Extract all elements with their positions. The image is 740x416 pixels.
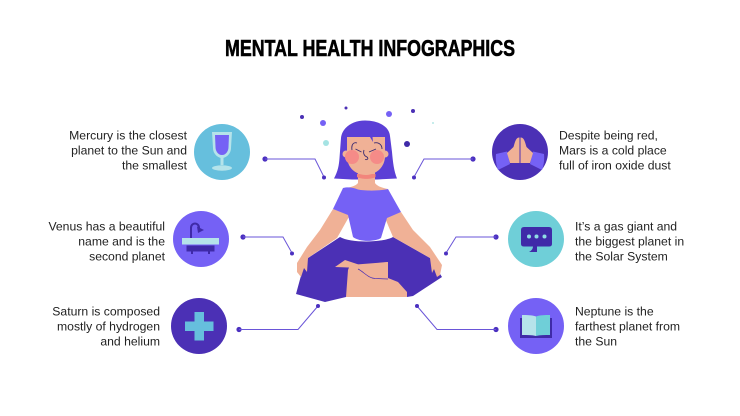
face (342, 137, 388, 175)
text: Neptune: farthest planet from (575, 320, 680, 334)
text: Jupiter: It’s a gas giant and (575, 220, 677, 234)
floating dots (300, 106, 434, 147)
shirt (333, 187, 401, 241)
text: Saturn: mostly of hydrogen (57, 320, 160, 334)
text: Venus: second planet (89, 250, 166, 264)
legs and foot (346, 262, 407, 297)
text: Mercury: planet to the Sun and (71, 144, 187, 158)
icon: plus (171, 298, 227, 354)
text: Mars: full of iron oxide dust (559, 158, 671, 172)
arms (297, 209, 350, 277)
connector: bottom left (236, 304, 320, 332)
text: Saturn: and helium (100, 334, 160, 348)
text: Mercury: Mercury is the closest (69, 128, 188, 142)
text: Venus: Venus has a beautiful (48, 220, 165, 234)
text: Saturn: Saturn is composed (52, 304, 160, 318)
connector: top left (262, 156, 326, 180)
icon: speech bubble (508, 211, 564, 267)
connector: middle left (240, 234, 294, 256)
text: Mercury: the smallest (122, 158, 188, 172)
text: Jupiter: the Solar System (575, 250, 668, 264)
text: Mars: Mars is a cold place (559, 144, 667, 158)
text: Neptune: the Sun (575, 334, 617, 348)
neck (343, 170, 388, 196)
text: Mars: Despite being red, (559, 128, 658, 142)
text: Jupiter: the biggest planet in (575, 234, 684, 248)
hair (334, 120, 397, 180)
text: Saturn (52, 304, 160, 348)
text: Venus (48, 220, 166, 264)
connector: middle right (444, 234, 499, 256)
text: Mercury (69, 128, 188, 172)
icon: praying hands (492, 124, 548, 180)
connector: top right (412, 156, 476, 180)
text: Neptune (575, 304, 680, 348)
pants (296, 237, 442, 302)
icon: wine glass (194, 124, 250, 180)
illustration: meditating woman (296, 106, 442, 302)
title: MENTAL HEALTH INFOGRAPHICS (225, 35, 515, 61)
connector: bottom right (415, 304, 499, 332)
text: Neptune: Neptune is the (575, 304, 654, 318)
icon: open book (508, 298, 564, 354)
text: Venus: name and is the (78, 234, 165, 248)
text: Jupiter (575, 220, 684, 264)
text: Mars (559, 128, 671, 172)
icon: bathtub (173, 211, 229, 267)
